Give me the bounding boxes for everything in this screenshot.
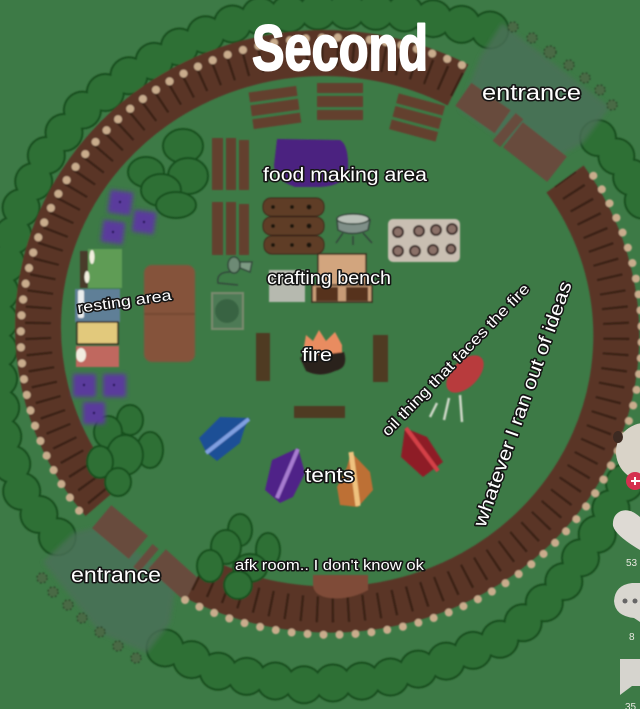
afk room xyxy=(313,575,368,598)
campfire xyxy=(300,330,345,374)
log wall: lower right xyxy=(185,165,640,635)
label: crafting bench: crafting bench xyxy=(267,268,391,288)
grinder xyxy=(212,257,252,329)
label: afk room: afk room.. I don't know ok xyxy=(235,557,425,574)
red bag xyxy=(76,346,119,367)
crafting bench xyxy=(269,254,372,302)
comment icon xyxy=(614,583,640,622)
label: fire: fire xyxy=(302,345,332,365)
bench right xyxy=(389,93,445,142)
bush: afk room xyxy=(197,514,280,599)
fire seating logs xyxy=(256,333,388,418)
cooking pot xyxy=(336,214,372,245)
tent: orange xyxy=(337,452,373,507)
title: Second xyxy=(252,12,428,84)
tent: purple xyxy=(265,448,305,503)
green bag xyxy=(80,249,122,288)
bench left xyxy=(249,86,301,129)
label: tents: tents xyxy=(305,465,354,487)
yellow bag xyxy=(77,322,118,344)
bench middle xyxy=(317,83,363,120)
gate planks xyxy=(455,83,567,182)
bush: top left xyxy=(128,129,208,218)
gate: top right entrance xyxy=(455,22,617,182)
social sidebar xyxy=(613,423,640,709)
heart icon xyxy=(613,510,640,550)
label: resting area: resting area xyxy=(76,287,173,317)
label: whatever: whatever I ran out of ideas xyxy=(470,279,577,531)
gate ground xyxy=(460,23,610,167)
log wall: upper left xyxy=(21,38,462,516)
avatar xyxy=(613,423,640,481)
log pile xyxy=(263,198,324,254)
comment count: 8 xyxy=(629,632,635,643)
blue bag xyxy=(75,289,120,322)
label: bottom entrance: entrance xyxy=(71,564,161,587)
follow button xyxy=(626,472,640,490)
gate ground xyxy=(43,527,177,653)
gate: bottom left entrance xyxy=(37,505,202,663)
top benches xyxy=(249,83,445,142)
gate planks xyxy=(92,505,202,601)
purple flowers: upper xyxy=(101,190,156,244)
tent: red xyxy=(401,428,443,477)
baking tray xyxy=(388,219,460,262)
side benches xyxy=(212,138,249,255)
bookmark icon xyxy=(620,659,640,695)
gate flowers xyxy=(37,573,141,663)
tent: blue xyxy=(199,417,250,461)
like count: 53 xyxy=(626,558,638,569)
purple flowers: lower xyxy=(73,374,126,424)
oil thing xyxy=(430,349,490,422)
sleeping bags xyxy=(75,249,122,367)
label: oil thing: oil thing that faces the fire xyxy=(379,281,533,440)
label: food making area: food making area xyxy=(263,165,427,186)
rug xyxy=(144,265,195,362)
bush: lower left xyxy=(87,405,163,496)
purple food area xyxy=(274,139,348,187)
gate flowers xyxy=(508,22,617,110)
label: top entrance: entrance xyxy=(482,80,581,105)
